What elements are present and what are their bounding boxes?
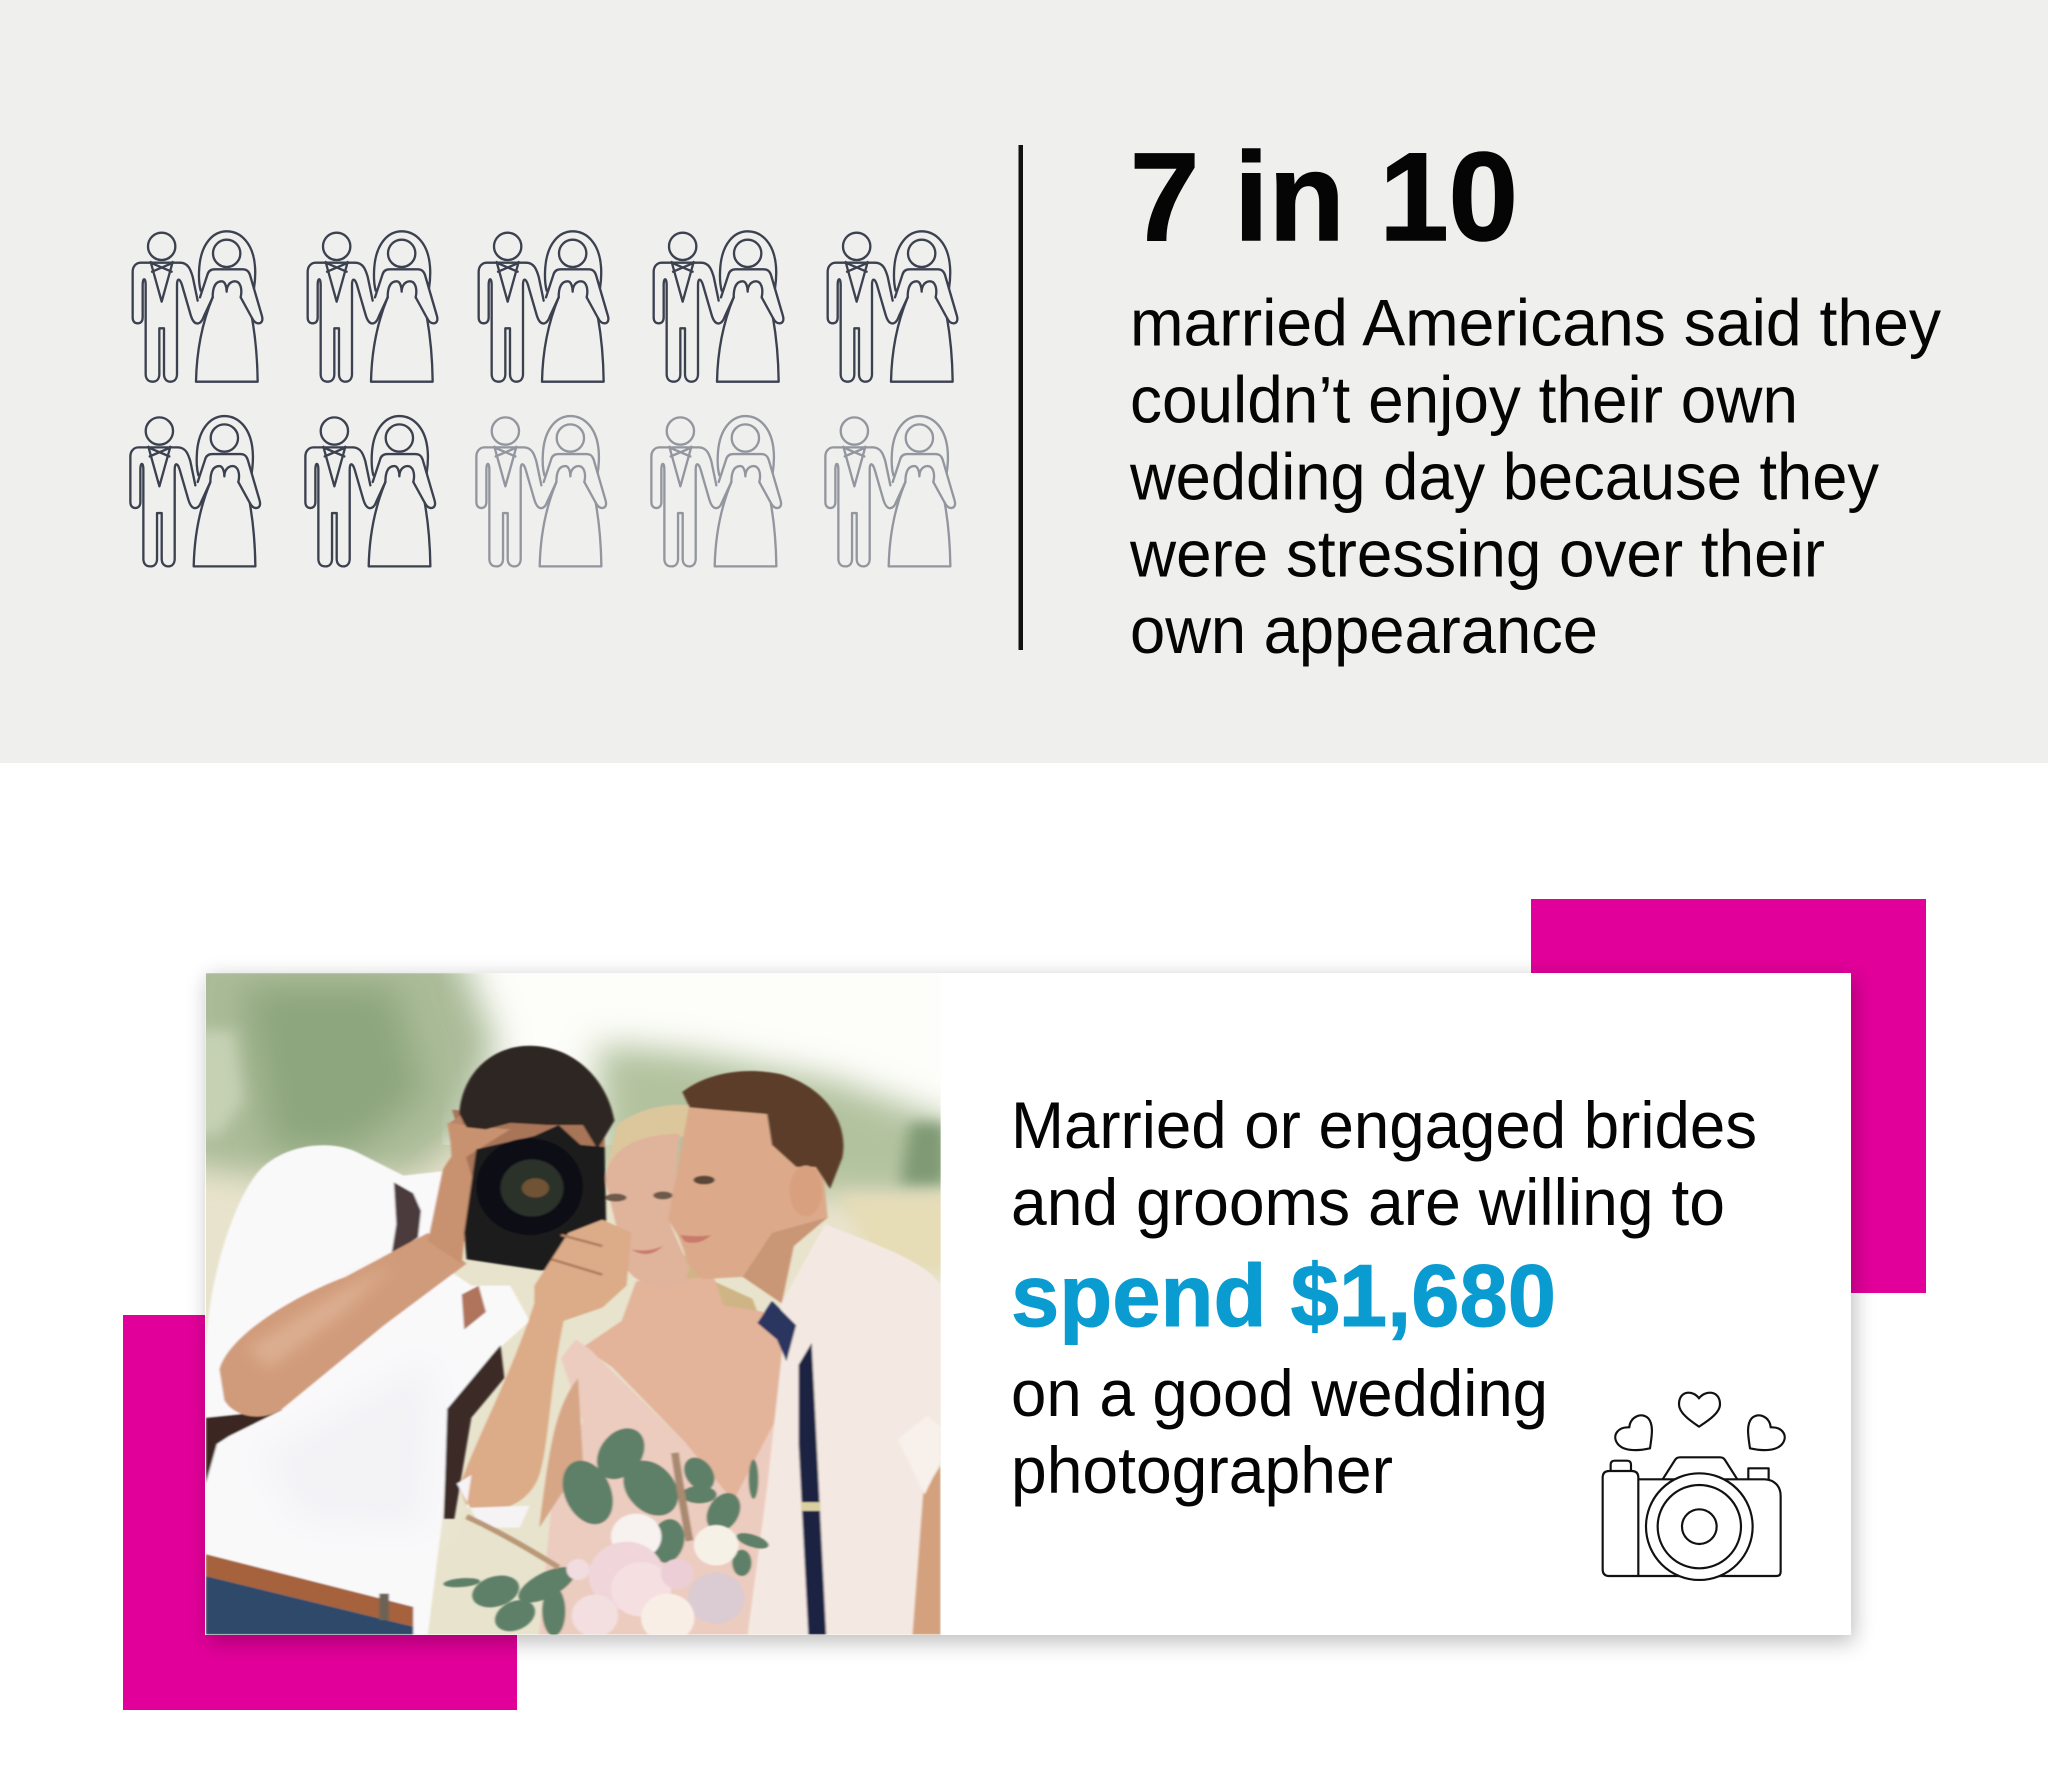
- text block: statistic description: couldn’t enjoy their own: [1130, 362, 1798, 436]
- icon: couple 2 (highlighted): [308, 231, 437, 382]
- panel: photographer callout: [123, 899, 1926, 1710]
- heading: 7 in 10: 7 in 10: [1130, 128, 1518, 267]
- card shadow: [208, 978, 1854, 1642]
- accent: magenta block top right: [1531, 899, 1926, 1293]
- photo: photographer showing a camera to bride and groom: [206, 973, 941, 1635]
- icon: couple 10 (muted): [825, 416, 955, 566]
- text block: willing to spend on a photographer: and grooms are willing to: [1011, 1165, 1725, 1239]
- text block: statistic description: were stressing over their: [1129, 516, 1825, 590]
- icon: couple 4 (highlighted): [654, 231, 783, 382]
- text block: willing to spend on a photographer: on a good wedding: [1011, 1356, 1548, 1430]
- icon: couple 5 (highlighted): [828, 231, 957, 382]
- text block: willing to spend on a photographer: [1011, 1088, 1757, 1507]
- divider line: [1018, 145, 1023, 650]
- icon: couple 9 (muted): [651, 416, 781, 566]
- accent: magenta block bottom left: [123, 1315, 517, 1710]
- icon: camera with hearts: [1603, 1393, 1785, 1580]
- highlight: spend $1,680: spend $1,680: [1011, 1246, 1556, 1345]
- pictogram: 7 of 10 couples highlighted: [130, 231, 957, 566]
- icon: couple 1 (highlighted): [133, 231, 262, 382]
- icon: couple 6 (highlighted): [130, 416, 260, 566]
- icon: couple 8 (muted): [476, 416, 606, 566]
- text block: willing to spend on a photographer: photographer: [1011, 1433, 1393, 1507]
- card: [205, 973, 1851, 1635]
- text block: statistic description: [1129, 286, 1941, 667]
- text block: statistic description: married Americans said they: [1130, 286, 1941, 360]
- text block: statistic description: wedding day because they: [1129, 440, 1879, 514]
- panel: grey statistic band: [0, 0, 2048, 763]
- text block: statistic description: own appearance: [1130, 593, 1598, 667]
- icon: couple 3 (highlighted): [479, 231, 608, 382]
- text block: willing to spend on a photographer: Married or engaged brides: [1011, 1088, 1757, 1162]
- icon: couple 7 (highlighted): [305, 416, 435, 566]
